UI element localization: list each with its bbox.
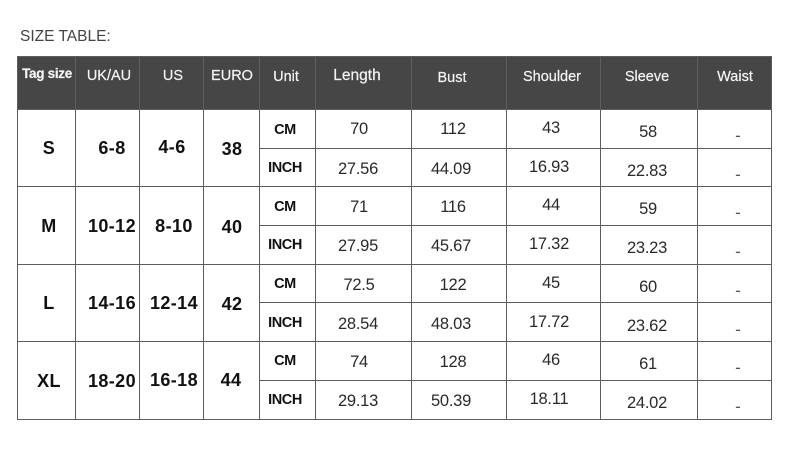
row: XL: 74: [350, 353, 368, 371]
row: M: 23.23: [627, 239, 667, 257]
table grid lines: [17, 56, 772, 420]
table header: [17, 56, 771, 109]
row: S: 43: [542, 119, 560, 137]
row: L: [43, 274, 741, 339]
row: XL: -: [735, 358, 741, 377]
row: S: 58: [639, 123, 657, 141]
row: M: CM: [274, 199, 296, 215]
row: M: M: [41, 216, 57, 236]
row: S: 22.83: [627, 162, 667, 180]
table header: Sleeve: [625, 69, 669, 85]
row: L: 60: [639, 278, 657, 296]
row: M: 10-12: [88, 216, 136, 236]
row: M: 40: [222, 217, 242, 237]
table header: US: [163, 68, 183, 84]
row: L: 122: [440, 276, 466, 294]
row: M: 71: [350, 198, 368, 216]
row: M: 8-10: [155, 216, 193, 236]
row: XL: -: [735, 397, 741, 416]
row: XL: CM: [274, 353, 296, 369]
table header: Tag size: [22, 66, 73, 81]
row: L: INCH: [268, 315, 302, 331]
row: XL: 46: [542, 351, 560, 369]
row: S: CM: [274, 122, 296, 138]
row: L: 28.54: [338, 315, 378, 333]
row: L: CM: [274, 276, 296, 292]
table header: Length: [333, 67, 381, 84]
row: L: 72.5: [343, 276, 375, 294]
row: L: -: [735, 281, 741, 300]
row: L: 23.62: [627, 317, 667, 335]
row: S: 38: [222, 139, 242, 159]
row: M: -: [735, 242, 741, 261]
row: S: S: [43, 138, 55, 158]
row: XL: 18.11: [530, 390, 568, 408]
row: XL: XL: [37, 371, 61, 391]
row: S: 27.56: [338, 160, 378, 178]
row: XL: 44: [221, 370, 241, 390]
row: M: 44: [542, 196, 560, 214]
row: XL: 16-18: [150, 370, 198, 390]
row: XL: [37, 351, 741, 416]
row: XL: 18-20: [88, 371, 136, 391]
row: S: -: [735, 126, 741, 145]
row: M: 45.67: [431, 237, 471, 255]
row: L: 45: [542, 274, 560, 292]
row: S: INCH: [268, 160, 302, 176]
row: M: [41, 196, 741, 261]
row: M: 116: [440, 198, 466, 216]
title: SIZE TABLE:: [20, 28, 111, 45]
row: S: 112: [440, 120, 466, 138]
table header: Waist: [717, 69, 753, 85]
table header: Bust: [437, 70, 467, 86]
row: L: 12-14: [150, 293, 198, 313]
row: XL: 50.39: [431, 392, 471, 410]
row: XL: 24.02: [627, 394, 667, 412]
row: XL: INCH: [268, 392, 302, 408]
table header: UK/AU: [87, 68, 131, 84]
row: L: L: [43, 293, 55, 313]
row: M: -: [735, 203, 741, 222]
row: S: 44.09: [431, 160, 471, 178]
row: M: 17.32: [529, 235, 569, 253]
table header: EURO: [211, 68, 253, 84]
row: L: -: [735, 320, 741, 339]
row: L: 14-16: [88, 293, 136, 313]
row: XL: 61: [639, 355, 657, 373]
row: XL: 128: [440, 353, 466, 371]
row: M: INCH: [268, 237, 302, 253]
row: S: 4-6: [158, 137, 186, 157]
row: S: -: [735, 165, 741, 184]
row: S: 70: [350, 120, 368, 138]
row: M: 27.95: [338, 237, 378, 255]
row: L: 17.72: [529, 313, 569, 331]
row: L: 42: [222, 294, 242, 314]
row: S: 16.93: [529, 158, 569, 176]
row: S: 6-8: [98, 138, 126, 158]
table header: Unit: [273, 69, 299, 85]
row: XL: 29.13: [338, 392, 378, 410]
row: L: 48.03: [431, 315, 471, 333]
row: M: 59: [639, 200, 657, 218]
row: S: [43, 119, 741, 184]
table header: Shoulder: [523, 69, 581, 85]
size table: [17, 56, 772, 420]
